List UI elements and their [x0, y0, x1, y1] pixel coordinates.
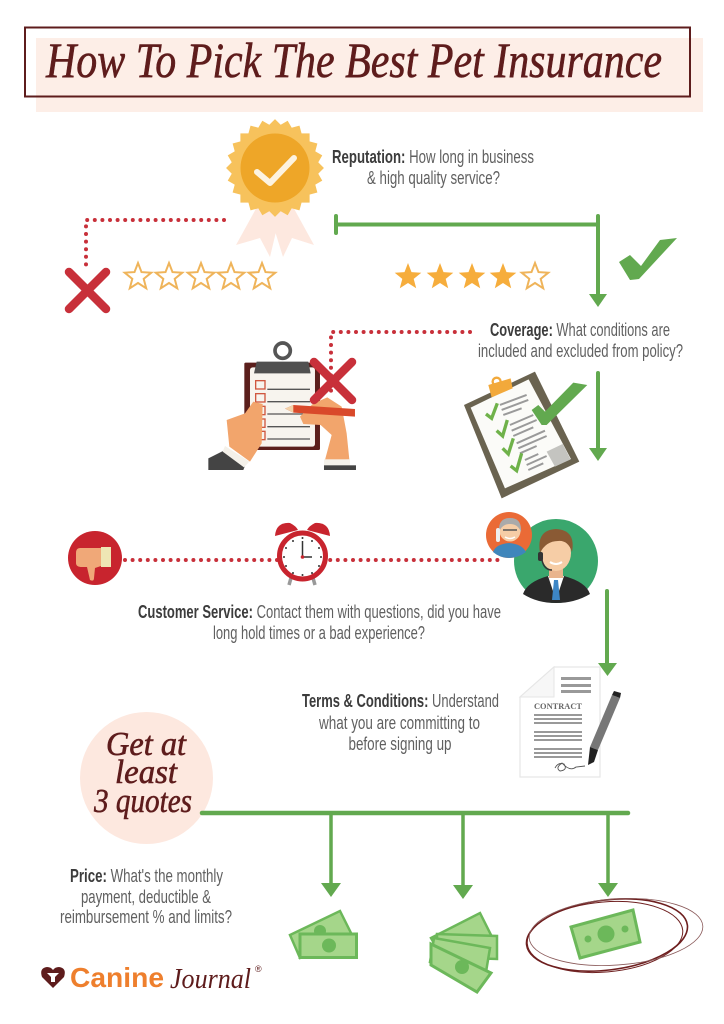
icon: checklist clipboard	[464, 372, 587, 498]
icon: elderly caller	[486, 512, 532, 558]
icon: cash stack two	[430, 913, 497, 992]
dotted path: bad reputation	[86, 220, 224, 270]
rating: empty stars	[125, 263, 275, 288]
rating: four filled stars	[395, 263, 548, 288]
icon: reputation medal	[226, 119, 324, 257]
logo: canine journal: Canine	[70, 962, 164, 993]
text: coverage: Coverage: What conditions are	[490, 320, 670, 340]
text: customer service: Customer Service: Contact them with questions, did you have	[138, 602, 501, 622]
arrows: three quotes	[202, 813, 628, 899]
arrow: customer service to terms	[598, 591, 617, 676]
text: terms and conditions: Terms & Conditions: Understand	[302, 691, 499, 711]
text: price	[60, 866, 232, 927]
callout: get at least 3 quotes	[80, 712, 213, 844]
logo: canine journal: ®	[255, 964, 262, 974]
text: price: Price: What's the monthly	[70, 866, 223, 886]
dotted path: bad coverage	[331, 332, 470, 398]
text: reputation	[332, 147, 534, 188]
icon: circled best price cash	[522, 890, 705, 980]
icon: contract and pen: CONTRACT	[534, 701, 582, 711]
callout: get at least 3 quotes: 3 quotes	[93, 783, 192, 820]
text: customer service: long hold times or a bad experience?	[213, 623, 425, 643]
icon: contract and pen	[520, 667, 621, 777]
dotted path: bad customer service	[125, 558, 502, 562]
text: terms and conditions: before signing up	[348, 734, 452, 754]
title banner	[25, 28, 703, 112]
callout: get at least 3 quotes: Get at	[106, 726, 187, 763]
text: customer service	[138, 602, 501, 643]
logo: canine journal: Journal	[170, 963, 251, 995]
icon: green check reputation	[619, 238, 677, 280]
icon: alarm clock	[275, 523, 330, 585]
text: reputation: & high quality service?	[367, 168, 500, 188]
text: terms and conditions	[302, 691, 499, 754]
icon: cash stack one	[290, 911, 356, 958]
logo: canine journal	[41, 962, 262, 995]
icon: thumbs down	[68, 531, 122, 585]
arrow: coverage down	[589, 373, 607, 461]
icon: red cross coverage	[314, 362, 352, 400]
text: price: payment, deductible &	[81, 887, 211, 907]
callout: get at least 3 quotes: least	[115, 754, 178, 791]
text: coverage	[478, 320, 683, 361]
icon: hands filling clipboard	[208, 343, 356, 470]
text: reputation: Reputation: How long in business	[332, 147, 534, 167]
icon: customer service agent	[514, 519, 598, 603]
text: terms and conditions: what you are committing to	[318, 713, 480, 733]
text: price: reimbursement % and limits?	[60, 907, 232, 927]
arrow: good reputation to coverage	[336, 216, 607, 307]
icon: red cross reputation	[69, 272, 106, 309]
